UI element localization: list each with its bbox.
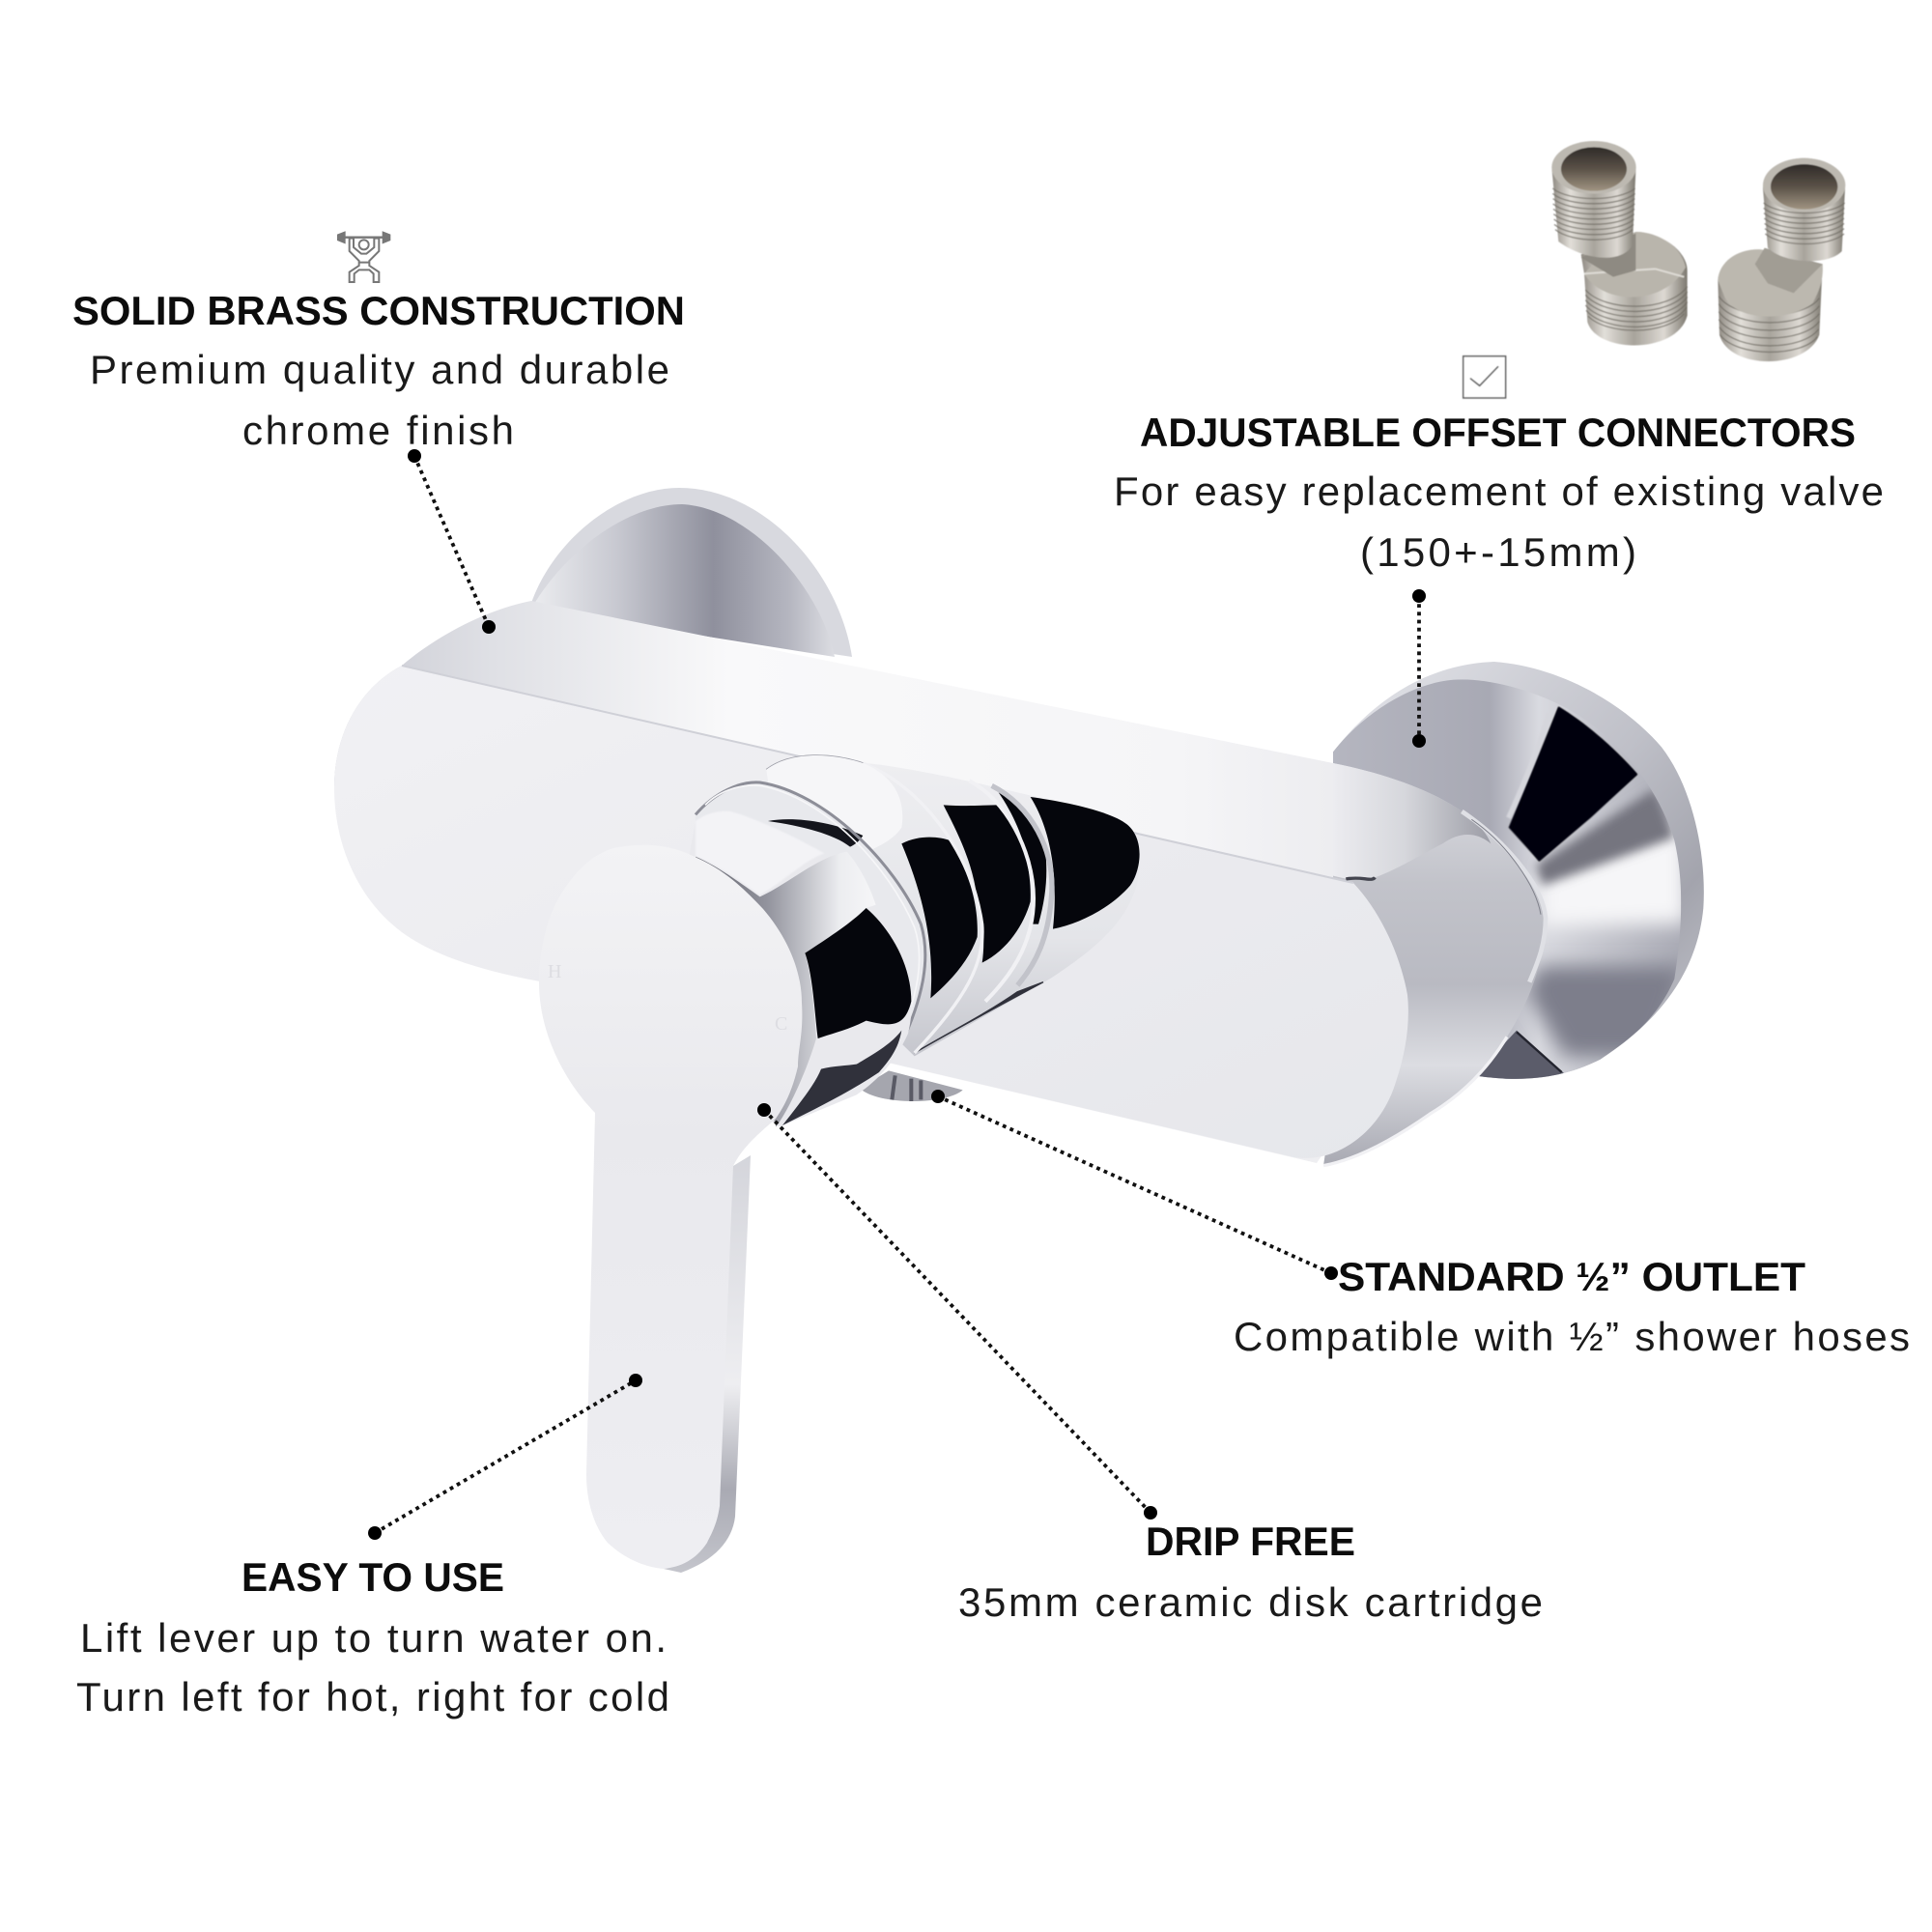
icon: weightlifter bbox=[338, 233, 389, 282]
heading: EASY TO USE bbox=[242, 1554, 504, 1600]
right wall plate bbox=[1330, 657, 1710, 1089]
heading: ADJUSTABLE OFFSET CONNECTORS bbox=[1140, 410, 1856, 455]
description: Premium quality and durable bbox=[90, 347, 669, 392]
icon: checkbox bbox=[1463, 356, 1506, 398]
lever handle face bbox=[539, 845, 802, 1569]
description: chrome finish bbox=[242, 408, 514, 453]
callout: drip free bbox=[958, 1519, 1543, 1625]
description: (150+-15mm) bbox=[1360, 529, 1636, 575]
callout: solid brass construction bbox=[72, 288, 685, 453]
description bbox=[76, 1615, 669, 1719]
description: 35mm ceramic disk cartridge bbox=[958, 1579, 1543, 1625]
leader: drip free bbox=[757, 1103, 1157, 1520]
lever handle chrome bbox=[657, 811, 912, 1573]
hose outlet fitting bbox=[860, 1070, 963, 1101]
callout: easy to use bbox=[76, 1554, 669, 1719]
leader: adjustable connectors bbox=[1412, 589, 1426, 748]
callout: standard outlet bbox=[1234, 1254, 1910, 1359]
body front face bbox=[334, 666, 1408, 1158]
left connector bbox=[1551, 141, 1688, 346]
photo: offset connectors bbox=[1463, 141, 1845, 398]
cold marker: C bbox=[775, 1013, 787, 1035]
description: Turn left for hot, right for cold bbox=[76, 1674, 669, 1719]
leader: easy to use bbox=[368, 1374, 642, 1540]
leader: standard outlet bbox=[931, 1090, 1338, 1280]
left wall plate bbox=[529, 488, 852, 657]
leader: solid brass bbox=[408, 449, 496, 634]
description bbox=[90, 347, 669, 453]
cartridge collars bbox=[696, 755, 1140, 1056]
valve body bbox=[334, 601, 1546, 1166]
heading: STANDARD ½” OUTLET bbox=[1338, 1254, 1805, 1299]
heading: SOLID BRASS CONSTRUCTION bbox=[72, 288, 685, 333]
description: Compatible with ½” shower hoses bbox=[1234, 1314, 1910, 1359]
body right end bbox=[1323, 763, 1546, 1166]
description: Lift lever up to turn water on. bbox=[80, 1615, 667, 1661]
product photo: shower mixer valve bbox=[334, 488, 1710, 1573]
callout: adjustable offset connectors bbox=[1114, 410, 1884, 575]
heading: DRIP FREE bbox=[1146, 1519, 1355, 1564]
hot marker: H bbox=[548, 961, 561, 982]
description: For easy replacement of existing valve bbox=[1114, 469, 1884, 514]
body top surface bbox=[334, 601, 1462, 1163]
description bbox=[1114, 469, 1884, 575]
right connector bbox=[1718, 158, 1845, 361]
